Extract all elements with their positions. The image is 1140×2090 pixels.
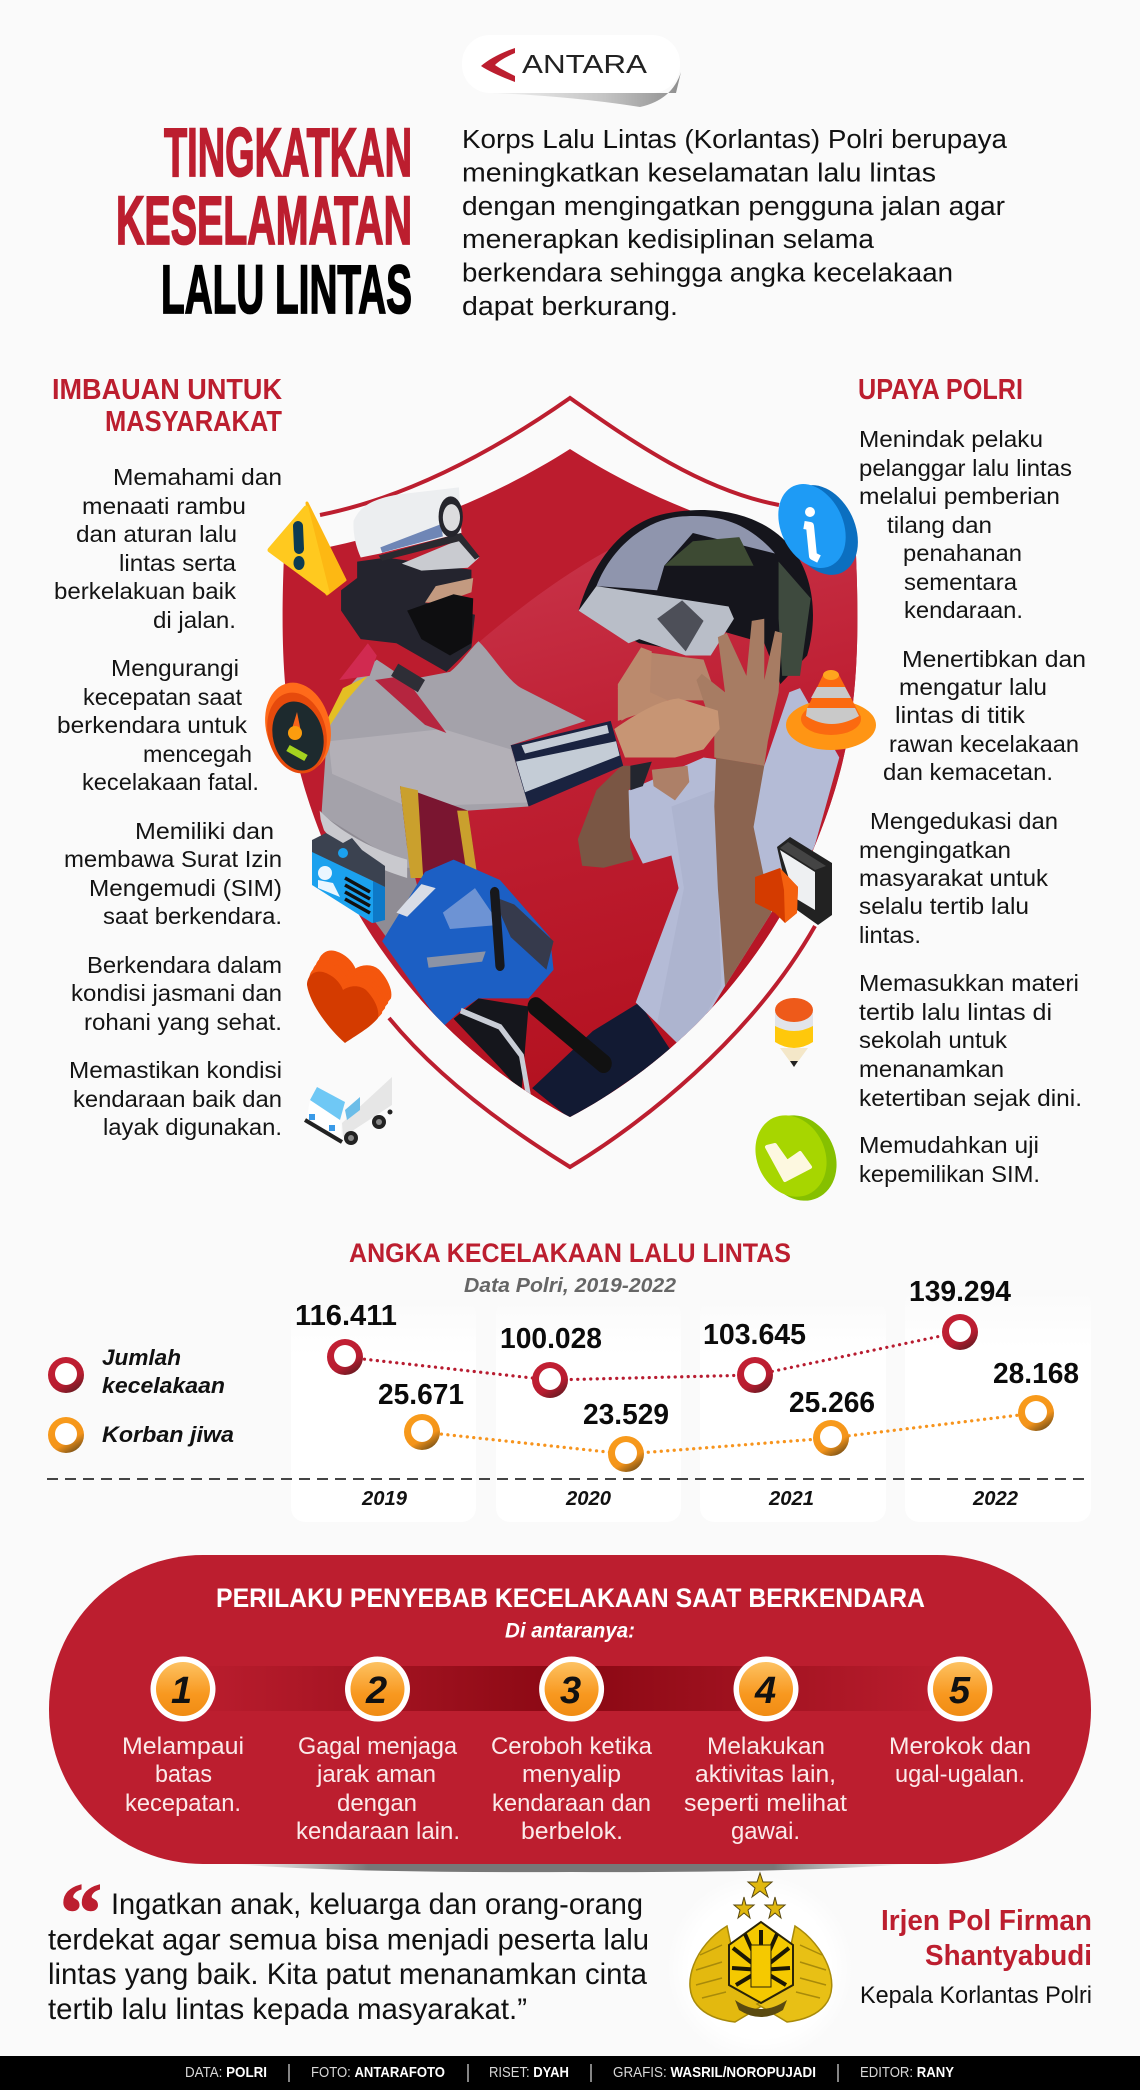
- rider trousers: [532, 1002, 671, 1120]
- icon: tablet and chat: [755, 837, 832, 925]
- icon: info: [765, 473, 872, 587]
- icon: Polri emblem: [666, 1873, 854, 2062]
- text block: SIM: membawa Surat Izin: [64, 846, 282, 872]
- icon: heart: [307, 952, 390, 1043]
- text block: uji SIM: Memudahkan uji: [859, 1132, 1039, 1158]
- text block: kendaraan: layak digunakan.: [103, 1114, 282, 1140]
- shield: red fill: [283, 449, 900, 1120]
- step 1: 1: [171, 1670, 192, 1712]
- text block: uji SIM: [859, 1132, 1040, 1187]
- rider left arm: [578, 766, 634, 868]
- text block: menertibkan: rawan kecelakaan: [889, 731, 1079, 757]
- series: jumlah kecelakaan: 116.411: [295, 1300, 397, 1332]
- intro text: dengan mengingatkan pengguna jalan agar: [462, 193, 1006, 221]
- footer credits: RISET: DYAH: [489, 2064, 569, 2081]
- text block: menertibkan: lintas di titik: [895, 702, 1026, 728]
- text block: materi sekolah: menanamkan: [859, 1056, 1004, 1082]
- text block: kondisi sehat: rohani yang sehat.: [84, 1009, 282, 1035]
- officer torso: [321, 641, 586, 872]
- title: LALU LINTAS: [161, 251, 412, 328]
- text block: rambu: di jalan.: [153, 607, 236, 633]
- intro text: menerapkan kedisiplinan selama: [462, 226, 875, 254]
- text block: kondisi sehat: Berkendara dalam: [87, 952, 282, 978]
- text block: kondisi sehat: [71, 952, 282, 1035]
- year labels: 2019: [361, 1488, 408, 1510]
- series: korban jiwa: 28.168: [993, 1358, 1079, 1390]
- step 3: menyalip: [522, 1761, 621, 1788]
- text block: rambu: Memahami dan: [113, 464, 282, 490]
- step 5: [889, 1656, 1031, 1788]
- text block: menindak: sementara: [904, 569, 1017, 595]
- text block: kecepatan: berkendara untuk: [57, 712, 248, 738]
- title: [116, 114, 412, 328]
- logo: ANTARA: ANTARA: [522, 49, 648, 79]
- intro text: [462, 126, 1008, 321]
- quote: “: [60, 1867, 102, 1960]
- text block: menindak: penahanan: [903, 540, 1022, 566]
- step 1: kecepatan.: [125, 1790, 241, 1817]
- panel: upaya polri: [858, 374, 1086, 1187]
- footer credits: FOTO: ANTARAFOTO: [311, 2064, 445, 2081]
- attribution: Irjen Pol Firman: [881, 1905, 1092, 1937]
- panel heading: [216, 1583, 925, 1642]
- shield with photo: [283, 398, 900, 1167]
- step 3: Ceroboh ketika: [491, 1733, 653, 1760]
- text block: rambu: dan aturan lalu: [76, 521, 237, 547]
- officer reflective sleeve: [511, 721, 623, 807]
- text block: rambu: menaati rambu: [82, 493, 246, 519]
- text block: kendaraan: kendaraan baik dan: [73, 1086, 282, 1112]
- officer hijab: [341, 558, 475, 672]
- officer sash: [400, 786, 477, 878]
- officer mask: [407, 594, 473, 656]
- step 4: aktivitas lain,: [695, 1761, 836, 1788]
- chart: angka kecelakaan lalu lintas: [47, 1238, 1091, 1522]
- footer credits: DATA: POLRI: [185, 2064, 267, 2081]
- text block: rambu: [54, 464, 282, 633]
- heading: imbauan: MASYARAKAT: [105, 406, 282, 438]
- text block: materi sekolah: Memasukkan materi: [859, 970, 1079, 996]
- panel heading: Di antaranya:: [505, 1620, 635, 1642]
- series: korban jiwa: [378, 1358, 1079, 1472]
- step 2: dengan: [337, 1790, 417, 1817]
- step 2: Gagal menjaga: [298, 1733, 458, 1760]
- text block: kecepatan: [57, 655, 259, 795]
- text block: kecepatan: kecepatan saat: [83, 684, 243, 710]
- step 4: seperti melihat: [684, 1790, 847, 1817]
- icon: check badge: [742, 1103, 850, 1213]
- photo: officer and rider (vector approximation): [320, 487, 839, 1120]
- officer hat: [353, 487, 461, 558]
- step 5: 5: [949, 1670, 971, 1712]
- icon: ID card: [312, 833, 385, 923]
- text block: kecepatan: mencegah: [143, 741, 252, 767]
- title: TINGKATKAN: [164, 114, 412, 191]
- text block: menindak: Menindak pelaku: [859, 426, 1043, 452]
- text block: mengedukasi: mengingatkan: [859, 837, 1011, 863]
- text block: menertibkan: [883, 646, 1086, 785]
- motorcycle: [382, 860, 554, 1027]
- icon: traffic cone: [786, 670, 876, 750]
- text block: SIM: [64, 818, 282, 929]
- step 3: berbelok.: [521, 1818, 623, 1845]
- text block: kondisi sehat: kondisi jasmani dan: [71, 980, 282, 1006]
- quote: lintas yang baik. Kita patut menanamkan cinta: [48, 1958, 647, 1991]
- series: jumlah kecelakaan: 100.028: [500, 1323, 602, 1355]
- footer credits: EDITOR: RANY: [860, 2064, 954, 2081]
- heading: upaya polri: UPAYA POLRI: [858, 374, 1023, 406]
- legend: Jumlah: [102, 1345, 181, 1370]
- text block: materi sekolah: [859, 970, 1082, 1111]
- step 4: Melakukan: [707, 1733, 825, 1760]
- text block: menertibkan: dan kemacetan.: [883, 759, 1053, 785]
- quote: terdekat agar semua bisa menjadi peserta lalu: [48, 1924, 649, 1956]
- step 2: 2: [365, 1670, 387, 1712]
- text block: mengedukasi: selalu tertib lalu: [859, 893, 1029, 919]
- icon: warning triangle: [270, 503, 345, 594]
- panel: imbauan untuk masyarakat: [52, 374, 282, 1140]
- chart heading: ANGKA KECELAKAAN LALU LINTAS: [349, 1238, 791, 1268]
- text block: menindak: pelanggar lalu lintas: [859, 455, 1072, 481]
- legend: kecelakaan: [102, 1373, 225, 1398]
- text block: materi sekolah: sekolah untuk: [859, 1027, 1008, 1053]
- text block: kendaraan: [69, 1057, 282, 1140]
- text block: materi sekolah: tertib lalu lintas di: [859, 999, 1052, 1025]
- text block: kecepatan: Mengurangi: [111, 655, 239, 681]
- series: jumlah kecelakaan: 139.294: [909, 1276, 1011, 1308]
- text block: rambu: berkelakuan baik: [54, 578, 237, 604]
- footer credits: [0, 2056, 1140, 2090]
- legend: Korban jiwa: [102, 1422, 234, 1447]
- year labels: 2022: [972, 1488, 1018, 1510]
- step 3: 3: [560, 1670, 581, 1712]
- attribution: Kepala Korlantas Polri: [860, 1982, 1092, 2009]
- text block: menindak: tilang dan: [887, 512, 992, 538]
- step 5: Merokok dan: [889, 1733, 1031, 1760]
- text block: menindak: kendaraan.: [904, 597, 1023, 623]
- text block: SIM: saat berkendara.: [103, 903, 282, 929]
- step 5: ugal-ugalan.: [895, 1761, 1025, 1788]
- year labels: [361, 1488, 1018, 1510]
- year columns: [291, 1290, 1091, 1522]
- text block: kendaraan: Memastikan kondisi: [69, 1057, 282, 1083]
- series: jumlah kecelakaan: 103.645: [703, 1319, 806, 1351]
- text block: uji SIM: kepemilikan SIM.: [859, 1161, 1040, 1187]
- year labels: 2021: [768, 1488, 814, 1510]
- text block: SIM: Mengemudi (SIM): [89, 875, 282, 901]
- text block: menertibkan: Menertibkan dan: [902, 646, 1086, 672]
- legend: [48, 1345, 234, 1453]
- rider helmet: [579, 510, 813, 684]
- text block: SIM: Memiliki dan: [135, 818, 274, 844]
- footer credits: GRAFIS: WASRIL/NOROPUJADI: [613, 2064, 816, 2081]
- rider face and hand: [618, 651, 718, 721]
- intro text: Korps Lalu Lintas (Korlantas) Polri berupaya: [462, 126, 1008, 154]
- step 4: 4: [754, 1670, 776, 1712]
- officer lower body: [328, 819, 417, 936]
- intro text: berkendara sehingga angka kecelakaan: [462, 260, 953, 288]
- step 2: kendaraan lain.: [296, 1818, 460, 1845]
- rider right arm and hand: [714, 758, 771, 986]
- step 4: gawai.: [731, 1818, 800, 1845]
- panel: perilaku penyebab kecelakaan: [49, 1555, 1091, 1872]
- step 2: [296, 1656, 460, 1845]
- series: korban jiwa: 25.671: [378, 1379, 464, 1411]
- step 2: jarak aman: [316, 1761, 436, 1788]
- quote: Ingatkan anak, keluarga dan orang-orang: [111, 1888, 643, 1921]
- shield: outer outline: [320, 398, 815, 1167]
- attribution: Shantyabudi: [925, 1940, 1092, 1972]
- heading: imbauan: IMBAUAN UNTUK: [52, 374, 282, 406]
- rider shirt: [627, 688, 839, 1051]
- quote: [48, 1867, 649, 2026]
- heading: imbauan: [52, 374, 282, 438]
- text block: materi sekolah: ketertiban sejak dini.: [859, 1085, 1082, 1111]
- intro text: meningkatkan keselamatan lalu lintas: [462, 160, 936, 188]
- text block: mengedukasi: [859, 808, 1058, 948]
- logo: ANTARA: [462, 35, 681, 107]
- title: KESELAMATAN: [116, 182, 412, 259]
- officer belt: [320, 811, 407, 878]
- text block: menertibkan: mengatur lalu: [899, 674, 1047, 700]
- text block: menindak: melalui pemberian: [859, 483, 1060, 509]
- year labels: 2020: [565, 1488, 611, 1510]
- chart heading: Data Polri, 2019-2022: [464, 1275, 676, 1297]
- icon: speedometer: [256, 676, 340, 780]
- icon: pencil: [775, 998, 813, 1067]
- step 1: [122, 1656, 244, 1817]
- attribution: [860, 1905, 1092, 2009]
- series: korban jiwa: 25.266: [789, 1387, 875, 1419]
- text block: menindak: [859, 426, 1072, 623]
- quote: tertib lalu lintas kepada masyarakat.”: [48, 1993, 527, 2026]
- text block: mengedukasi: Mengedukasi dan: [870, 808, 1058, 834]
- step 3: kendaraan dan: [492, 1790, 651, 1817]
- text block: mengedukasi: masyarakat untuk: [859, 865, 1049, 891]
- series: jumlah kecelakaan: [295, 1276, 1011, 1398]
- text block: rambu: lintas serta: [119, 550, 236, 576]
- intro text: dapat berkurang.: [462, 293, 678, 321]
- panel heading: PERILAKU PENYEBAB KECELAKAAN SAAT BERKENDARA: [216, 1583, 925, 1613]
- text block: mengedukasi: lintas.: [859, 922, 921, 948]
- step 4: [684, 1656, 847, 1845]
- series: korban jiwa: 23.529: [583, 1399, 669, 1431]
- step 1: batas: [155, 1761, 212, 1788]
- officer hand: [614, 698, 720, 758]
- step 3: [491, 1656, 653, 1845]
- icon: van: [305, 1077, 392, 1145]
- text block: kecepatan: kecelakaan fatal.: [82, 769, 259, 795]
- step 1: Melampaui: [122, 1733, 244, 1760]
- chart heading: [349, 1238, 791, 1297]
